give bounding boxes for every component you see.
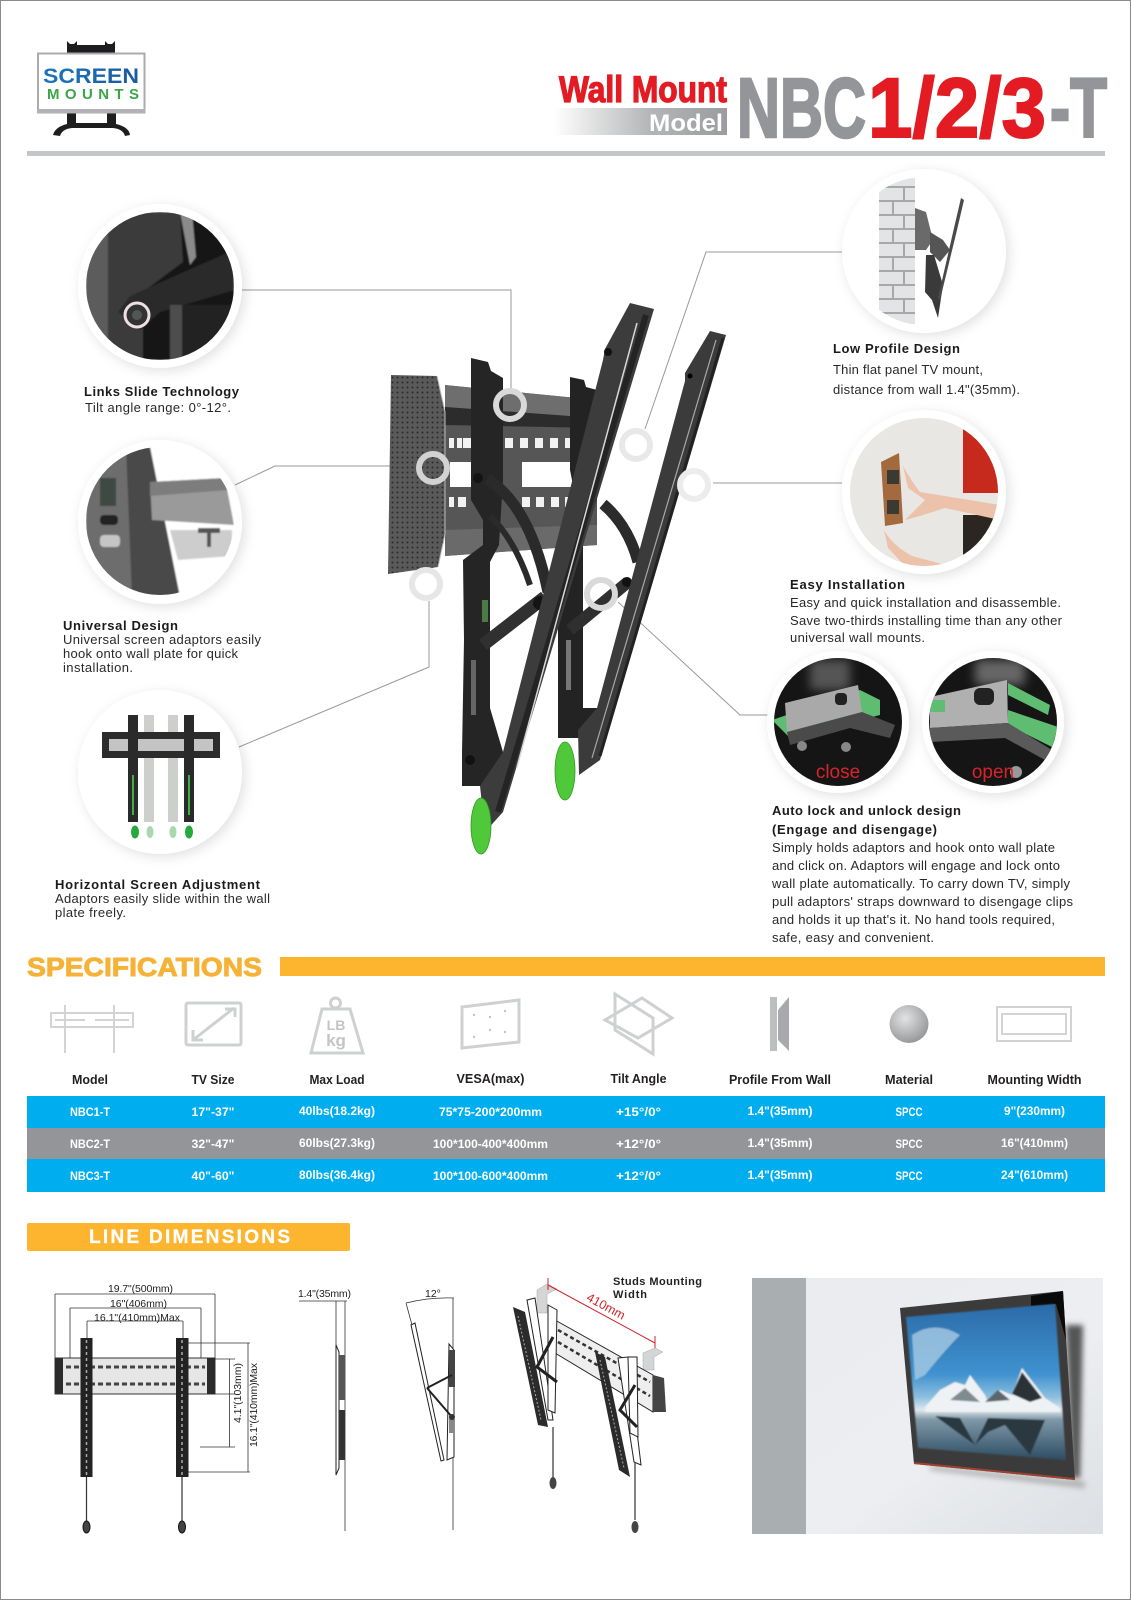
text: Auto lock and unlock design: safe, easy and convenient.	[772, 930, 934, 945]
table header: Mounting Width	[988, 1073, 1082, 1087]
photo: close: close	[816, 762, 860, 783]
text: Easy Installation	[790, 577, 1063, 645]
studs	[537, 1284, 663, 1370]
logo: Screen Mounts: MOUNTS	[47, 86, 139, 103]
table header: Max Load	[310, 1073, 364, 1087]
row NBC1-T	[27, 1096, 1105, 1128]
row NBC3-T	[27, 1159, 1105, 1192]
text: Universal Design: Universal screen adaptors easily	[63, 632, 262, 647]
text: Auto lock and unlock design: and holds it up that's it. No hand tools required,	[772, 912, 1055, 927]
photo: close	[767, 651, 909, 793]
text: Universal Design: Universal Design	[63, 618, 178, 633]
product: tilting wall mount	[388, 303, 726, 854]
row NBC1-T: 17"-37"	[192, 1107, 234, 1119]
heading: Specifications	[27, 952, 1105, 982]
labels	[94, 1283, 260, 1447]
heading: Line Dimensions: LINE DIMENSIONS	[89, 1227, 290, 1248]
row NBC1-T: 1.4"(35mm)	[748, 1106, 813, 1118]
row NBC1-T: +15°/0°	[616, 1107, 661, 1119]
row NBC2-T: SPCC	[896, 1139, 922, 1151]
panel: Horizontal Screen Adjustment	[55, 690, 270, 920]
icon: mounting width	[997, 1007, 1071, 1041]
isometric mount	[513, 1298, 666, 1533]
diagram: tilt angle	[406, 1288, 455, 1530]
icon: material sphere	[890, 1005, 928, 1043]
heading: Specifications: SPECIFICATIONS	[27, 952, 262, 982]
title: Wall Mount Model NBC1/2/3-T	[554, 61, 1107, 155]
labels: 19.7"(500mm)	[108, 1283, 173, 1295]
photo: mount on brick wall	[842, 169, 1006, 333]
title: Wall Mount Model NBC1/2/3-T: NBC	[737, 61, 866, 155]
row NBC3-T: 1.4"(35mm)	[748, 1170, 813, 1182]
text: Easy Installation: universal wall mounts.	[790, 630, 925, 645]
spec table	[27, 1072, 1105, 1192]
table header: VESA(max)	[456, 1072, 524, 1086]
row NBC2-T	[27, 1128, 1105, 1159]
row NBC3-T: 80lbs(36.4kg)	[299, 1170, 375, 1182]
front mounting arm	[462, 358, 548, 786]
photo: sliding adaptors	[78, 690, 242, 854]
row NBC2-T: 16"(410mm)	[1001, 1138, 1068, 1150]
text: Low Profile Design	[833, 341, 1020, 397]
text: Auto lock and unlock design: (Engage and disengage)	[772, 822, 937, 837]
panel: Universal Design	[63, 440, 262, 675]
row NBC3-T: 24"(610mm)	[1001, 1170, 1068, 1182]
highlight rings	[412, 391, 708, 608]
photo: hands installing plate	[842, 410, 1006, 574]
icon: max load weight: LB	[327, 1017, 345, 1033]
front rail	[471, 303, 654, 854]
text: Auto lock and unlock design: Simply holds adaptors and hook onto wall plate	[772, 840, 1055, 855]
icon: max load weight: kg	[326, 1031, 346, 1050]
title: Wall Mount Model NBC1/2/3-T: Wall Mount	[559, 69, 727, 110]
row NBC3-T: NBC3-T	[70, 1171, 110, 1183]
text: Low Profile Design: Thin flat panel TV mount,	[833, 362, 983, 377]
diagram: profile from wall: 1.4"(35mm)	[298, 1288, 351, 1300]
text: Links Slide Technology: Tilt angle range: 0°-12°.	[85, 400, 231, 415]
panel: Links Slide Technology	[78, 204, 242, 415]
text: Horizontal Screen Adjustment: Adaptors easily slide within the wall	[55, 891, 270, 906]
panel: Easy Installation	[790, 410, 1063, 645]
text: Low Profile Design: Low Profile Design	[833, 341, 960, 356]
table header: Tilt Angle	[610, 1072, 667, 1086]
row NBC1-T: NBC1-T	[70, 1107, 110, 1119]
row NBC3-T: 100*100-600*400mm	[433, 1171, 548, 1183]
table header	[72, 1072, 1082, 1087]
text: Horizontal Screen Adjustment	[55, 877, 270, 920]
label: Studs Mounting	[613, 1276, 702, 1288]
logo: Screen Mounts: SCREEN	[43, 65, 139, 88]
row NBC2-T: 60lbs(27.3kg)	[299, 1138, 375, 1150]
diagram: studs mounting width	[513, 1276, 702, 1533]
icon: TV size	[186, 1003, 241, 1045]
dimension lines	[55, 1294, 250, 1472]
text: Low Profile Design: distance from wall 1.4"(35mm).	[833, 382, 1020, 397]
labels: 16"(406mm)	[110, 1298, 167, 1310]
panel: Auto lock and unlock design	[767, 651, 1074, 945]
icon: max load weight	[311, 998, 363, 1053]
labels: 16.1"(410mm)Max	[248, 1362, 260, 1447]
table header: Material	[885, 1073, 933, 1087]
row NBC1-T: 9"(230mm)	[1004, 1106, 1065, 1118]
title: Wall Mount Model NBC1/2/3-T: Model	[649, 110, 723, 137]
photo: open	[922, 651, 1064, 793]
icon: VESA plate	[462, 1000, 519, 1048]
text: Easy Installation: Save two-thirds installing time than any other	[790, 613, 1063, 628]
icon: model mount	[51, 1005, 133, 1053]
text: Auto lock and unlock design	[771, 803, 1074, 945]
table header: Profile From Wall	[729, 1073, 831, 1087]
text: Auto lock and unlock design: Auto lock and unlock design	[772, 803, 961, 818]
icon: profile	[770, 997, 789, 1051]
row NBC2-T: 32"-47"	[192, 1139, 234, 1151]
spec icons	[51, 994, 1071, 1054]
panel: Low Profile Design	[833, 169, 1020, 397]
label: Width	[613, 1289, 647, 1301]
logo: Screen Mounts	[37, 41, 145, 136]
labels: 16.1"(410mm)Max	[94, 1312, 181, 1324]
text: Easy Installation: Easy Installation	[790, 577, 905, 592]
text: Links Slide Technology	[84, 384, 240, 415]
row NBC2-T: 1.4"(35mm)	[748, 1138, 813, 1150]
text: Auto lock and unlock design: wall plate automatically. To carry down TV, simply	[771, 876, 1070, 891]
title: Wall Mount Model NBC1/2/3-T: -T	[1050, 61, 1107, 155]
title: Wall Mount Model NBC1/2/3-T: 1/2/3	[868, 61, 1046, 155]
mount drawing	[55, 1338, 215, 1533]
rear mounting arm	[558, 377, 638, 738]
row NBC2-T: +12°/0°	[616, 1139, 661, 1151]
icon: tilt angle	[605, 994, 672, 1054]
row NBC2-T: NBC2-T	[70, 1139, 110, 1151]
labels: 4.1"(103mm)	[232, 1363, 244, 1423]
text: Universal Design	[63, 618, 262, 675]
text: Easy Installation: Easy and quick installation and disassemble.	[790, 595, 1061, 610]
text: Universal Design: installation.	[63, 660, 133, 675]
dimension 410mm	[548, 1278, 655, 1348]
row NBC1-T: 40lbs(18.2kg)	[299, 1106, 375, 1118]
text: Universal Design: hook onto wall plate for quick	[63, 646, 238, 661]
row NBC1-T: SPCC	[896, 1107, 922, 1119]
row NBC2-T: 100*100-400*400mm	[433, 1139, 548, 1151]
photo: open: open	[972, 762, 1014, 783]
diagram: profile from wall	[298, 1288, 351, 1531]
wall plate	[388, 375, 597, 574]
row NBC3-T: SPCC	[896, 1171, 922, 1183]
photo: TV mounted on wall	[752, 1278, 1103, 1534]
table header: TV Size	[192, 1073, 235, 1087]
table header: Model	[72, 1073, 108, 1087]
dimension 410mm: 410mm	[584, 1290, 628, 1323]
row NBC1-T: 75*75-200*200mm	[439, 1107, 542, 1119]
heading: Line Dimensions	[27, 1223, 350, 1251]
diagram: front view	[55, 1283, 260, 1533]
text: Auto lock and unlock design: and click on. Adaptors will engage and lock onto	[772, 858, 1060, 873]
row NBC3-T: +12°/0°	[616, 1171, 661, 1183]
rear rail	[555, 331, 726, 800]
text: Auto lock and unlock design: pull adaptors' straps downward to disengage clips	[772, 894, 1074, 909]
text: Links Slide Technology: Links Slide Technology	[84, 384, 240, 399]
photo: bolt and link	[78, 204, 242, 368]
row NBC3-T: 40"-60"	[192, 1171, 234, 1183]
text: Horizontal Screen Adjustment: Horizontal Screen Adjustment	[55, 877, 261, 892]
photo: screen adaptor hook	[78, 440, 242, 604]
text: Horizontal Screen Adjustment: plate freely.	[55, 905, 126, 920]
label	[613, 1276, 702, 1301]
callout leader lines	[235, 252, 842, 747]
diagram: tilt angle: 12°	[425, 1288, 441, 1300]
